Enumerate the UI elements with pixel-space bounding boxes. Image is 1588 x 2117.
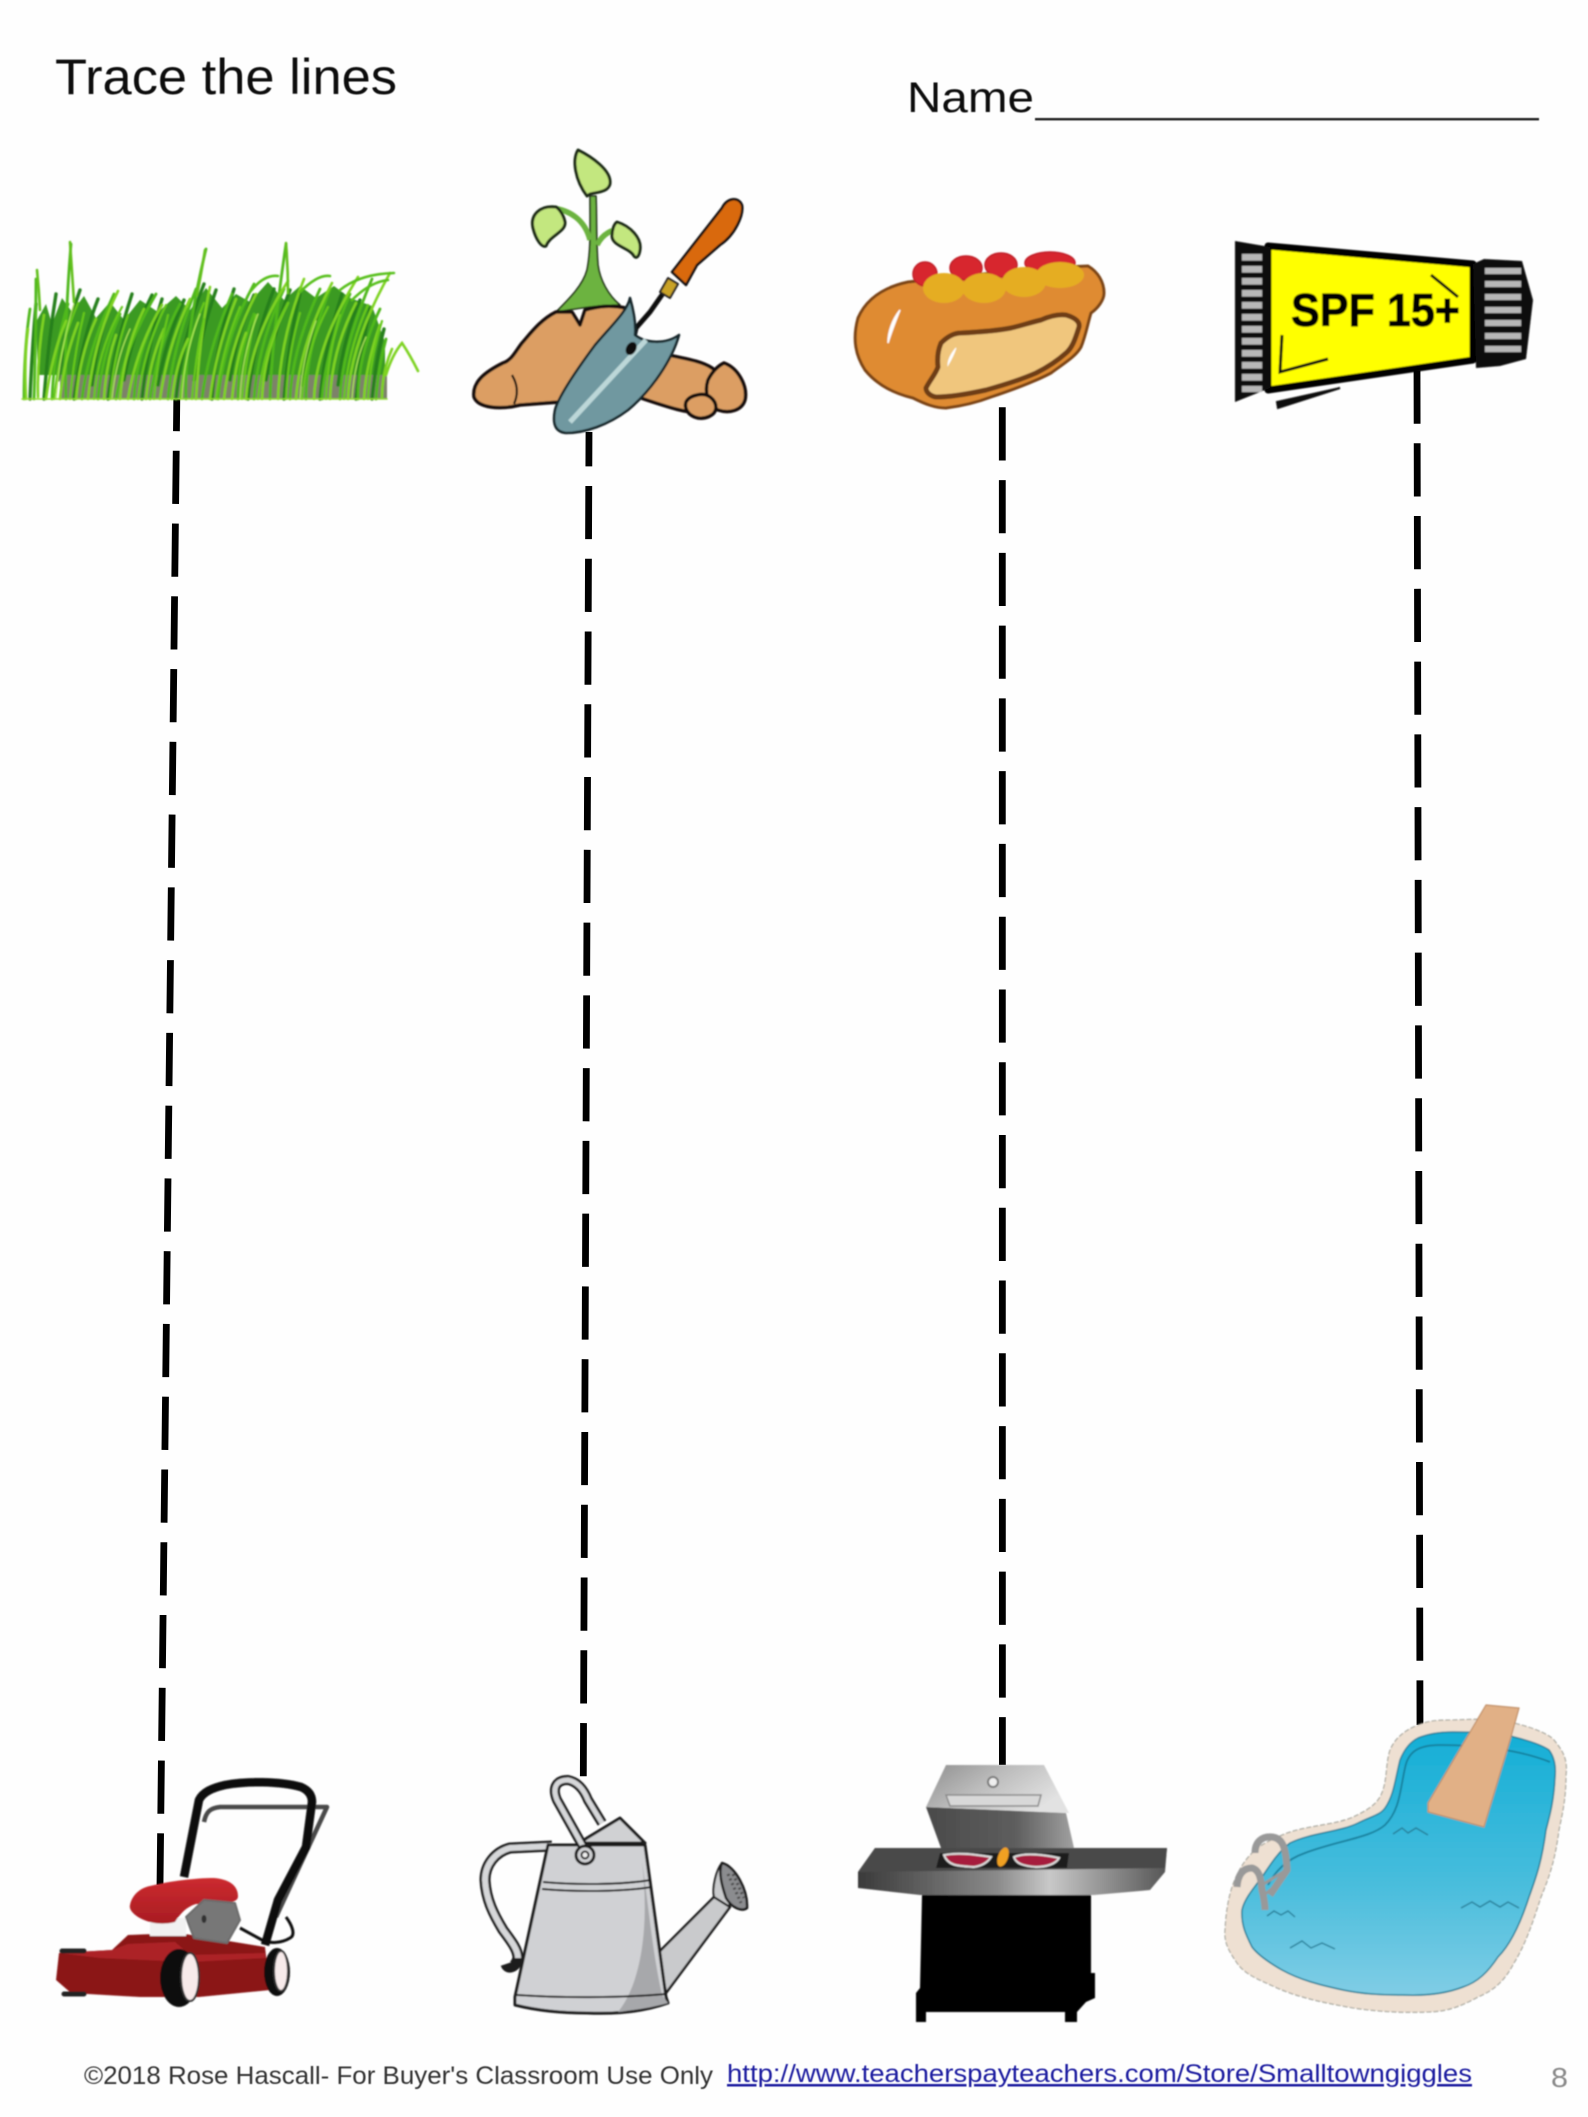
icon: sunscreen tube xyxy=(1235,241,1533,408)
tube ink marks xyxy=(1280,275,1458,372)
ripples xyxy=(1267,1828,1519,1949)
wheels xyxy=(160,1949,198,2007)
footer store link: http://www.teacherspayteachers.com/Store/Smalltowngiggles xyxy=(727,2060,1472,2088)
bun inner xyxy=(926,315,1079,397)
tube body xyxy=(1268,246,1473,390)
cabinet xyxy=(916,1895,1095,2022)
lid handle xyxy=(946,1795,1041,1806)
icon: seedling and trowel xyxy=(474,150,746,433)
footer copyright: ©2018 Rose Hascall- For Buyer's Classroom Use Only xyxy=(84,2062,714,2090)
pool deck xyxy=(1225,1719,1566,2012)
title: Trace the lines xyxy=(55,49,397,105)
top cap xyxy=(580,1818,645,1843)
grey engine xyxy=(186,1900,240,1943)
red engine cover xyxy=(130,1878,238,1924)
SPF label: SPF 15+ xyxy=(1291,284,1460,336)
trowel handle and blade xyxy=(633,282,671,342)
mustard xyxy=(923,262,1084,303)
name field: Name xyxy=(907,74,1034,122)
seedling xyxy=(532,150,640,312)
top loop handle xyxy=(555,1780,602,1850)
icon: swimming pool xyxy=(1225,1705,1566,2012)
shelf xyxy=(858,1848,1167,1895)
grate with steaks xyxy=(936,1853,1069,1868)
page number: 8 xyxy=(1551,2062,1568,2093)
icon: grass xyxy=(22,242,418,399)
icon: hot dog xyxy=(855,252,1104,408)
icon: watering can xyxy=(485,1780,747,2013)
dashed line 1: grass to mower xyxy=(160,399,177,1885)
diving board xyxy=(1428,1705,1519,1827)
spout xyxy=(658,1897,730,1993)
cable xyxy=(240,1917,293,1942)
right cap xyxy=(1473,259,1533,368)
upper lid xyxy=(926,1765,1069,1813)
bun xyxy=(855,266,1104,408)
black front handle xyxy=(184,1782,312,1945)
highlights xyxy=(888,310,900,343)
icon: barbecue grill xyxy=(858,1765,1167,2022)
ladder xyxy=(1237,1837,1287,1910)
deck xyxy=(56,1933,270,1997)
white engine block xyxy=(150,1918,186,1936)
icon: lawn mower xyxy=(56,1782,327,2007)
body xyxy=(515,1845,668,2013)
dashed line 3: hot dog to grill xyxy=(999,407,1006,1765)
left cap xyxy=(1235,241,1270,402)
soil mounds xyxy=(474,306,746,418)
dashed line 2: trowel to watering can xyxy=(583,432,589,1777)
inner pool wall line xyxy=(1268,1745,1550,1885)
dashed line 4: sunscreen to pool xyxy=(1417,370,1420,1725)
side handle xyxy=(485,1846,552,1967)
ketchup xyxy=(913,252,1075,286)
lower lid xyxy=(926,1807,1074,1848)
grey rear handle xyxy=(204,1807,327,1917)
water xyxy=(1242,1732,1555,1995)
